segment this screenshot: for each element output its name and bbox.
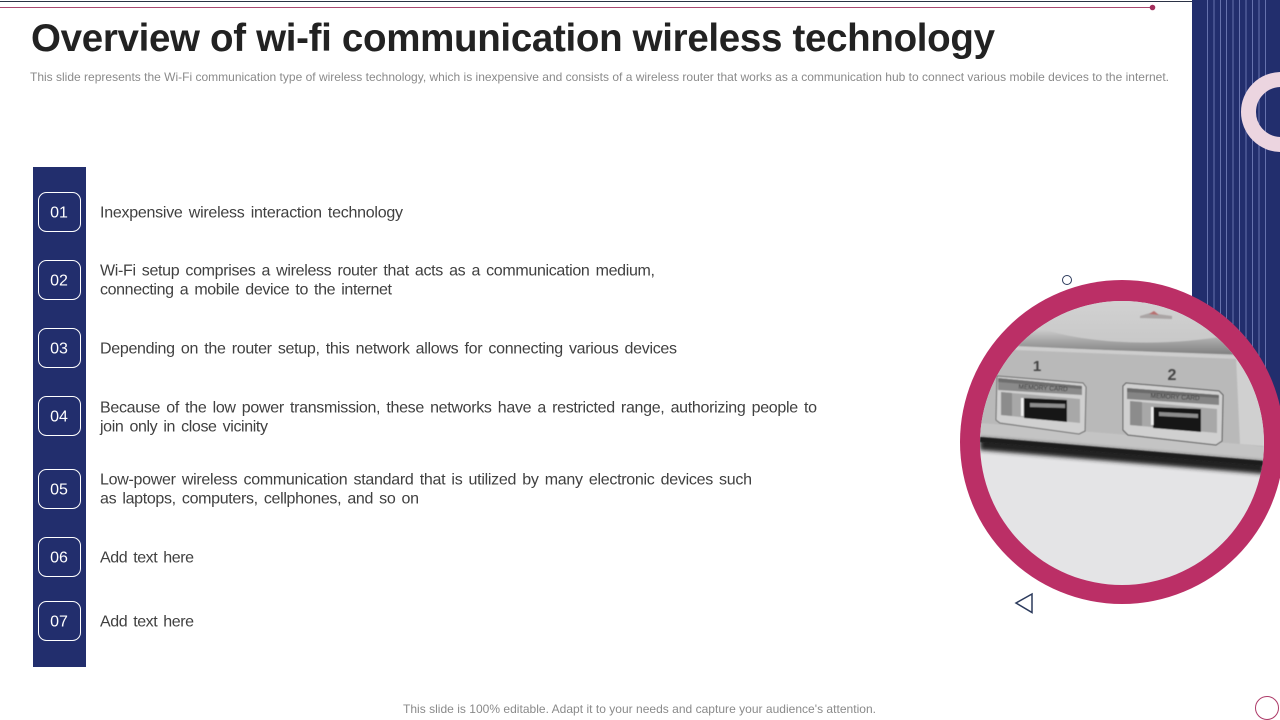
subtitle: This slide represents the Wi-Fi communication type of wireless technology, which is inexpensive and consists of a wireless router that works as a communication hub to connect various mobile devices to the internet.: [30, 70, 1169, 84]
item 05: [38, 470, 752, 508]
panel: numbered sidebar: [33, 167, 86, 667]
item 03: [38, 328, 677, 368]
item 06: Add text here: [100, 550, 194, 566]
item 06: 06: [50, 550, 68, 566]
item 02: Wi-Fi setup comprises a wireless router that acts as a communication medium,: [100, 262, 655, 280]
item 05: as laptops, computers, cellphones, and so on: [100, 490, 419, 508]
item 04: join only in close vicinity: [99, 418, 268, 436]
item 03: Depending on the router setup, this network allows for connecting various devices: [100, 340, 677, 358]
item 07: [38, 602, 194, 640]
decorative triangle: [1016, 594, 1032, 612]
decorative pink ring: [1248, 80, 1280, 144]
item 04: [38, 396, 817, 436]
item 01: Inexpensive wireless interaction technology: [100, 204, 403, 222]
circular photo with magenta ring: MEMORY CARD: [1150, 393, 1200, 402]
circular photo with magenta ring: 1: [1033, 358, 1041, 375]
item 01: 01: [50, 204, 68, 222]
item 05: Low-power wireless communication standard that is utilized by many electronic devices such: [100, 472, 752, 488]
top header rules: [0, 1, 1192, 10]
item 03: 03: [50, 340, 68, 358]
circular photo with magenta ring: [960, 280, 1280, 604]
circular photo with magenta ring: MEMORY CARD: [1018, 384, 1068, 393]
item 07: 07: [50, 614, 68, 630]
item 04: 04: [50, 408, 68, 426]
item 06: [38, 538, 194, 576]
footer note: This slide is 100% editable. Adapt it to your needs and capture your audience's attention.: [403, 702, 876, 716]
decorative corner circle: [1256, 696, 1278, 720]
title: Overview of wi-fi communication wireless technology: [31, 17, 996, 60]
circular photo with magenta ring: 2: [1168, 367, 1177, 384]
item 07: Add text here: [100, 614, 194, 630]
side panel: navy striped band: [1192, 0, 1280, 420]
item 04: Because of the low power transmission, these networks have a restricted range, authorizing people to: [100, 400, 817, 416]
item 01: [38, 192, 403, 232]
item 05: 05: [50, 482, 68, 498]
item 02: 02: [50, 272, 68, 290]
item 02: connecting a mobile device to the internet: [100, 282, 393, 298]
item 02: [38, 260, 655, 300]
decorative small circle: [1062, 276, 1072, 284]
